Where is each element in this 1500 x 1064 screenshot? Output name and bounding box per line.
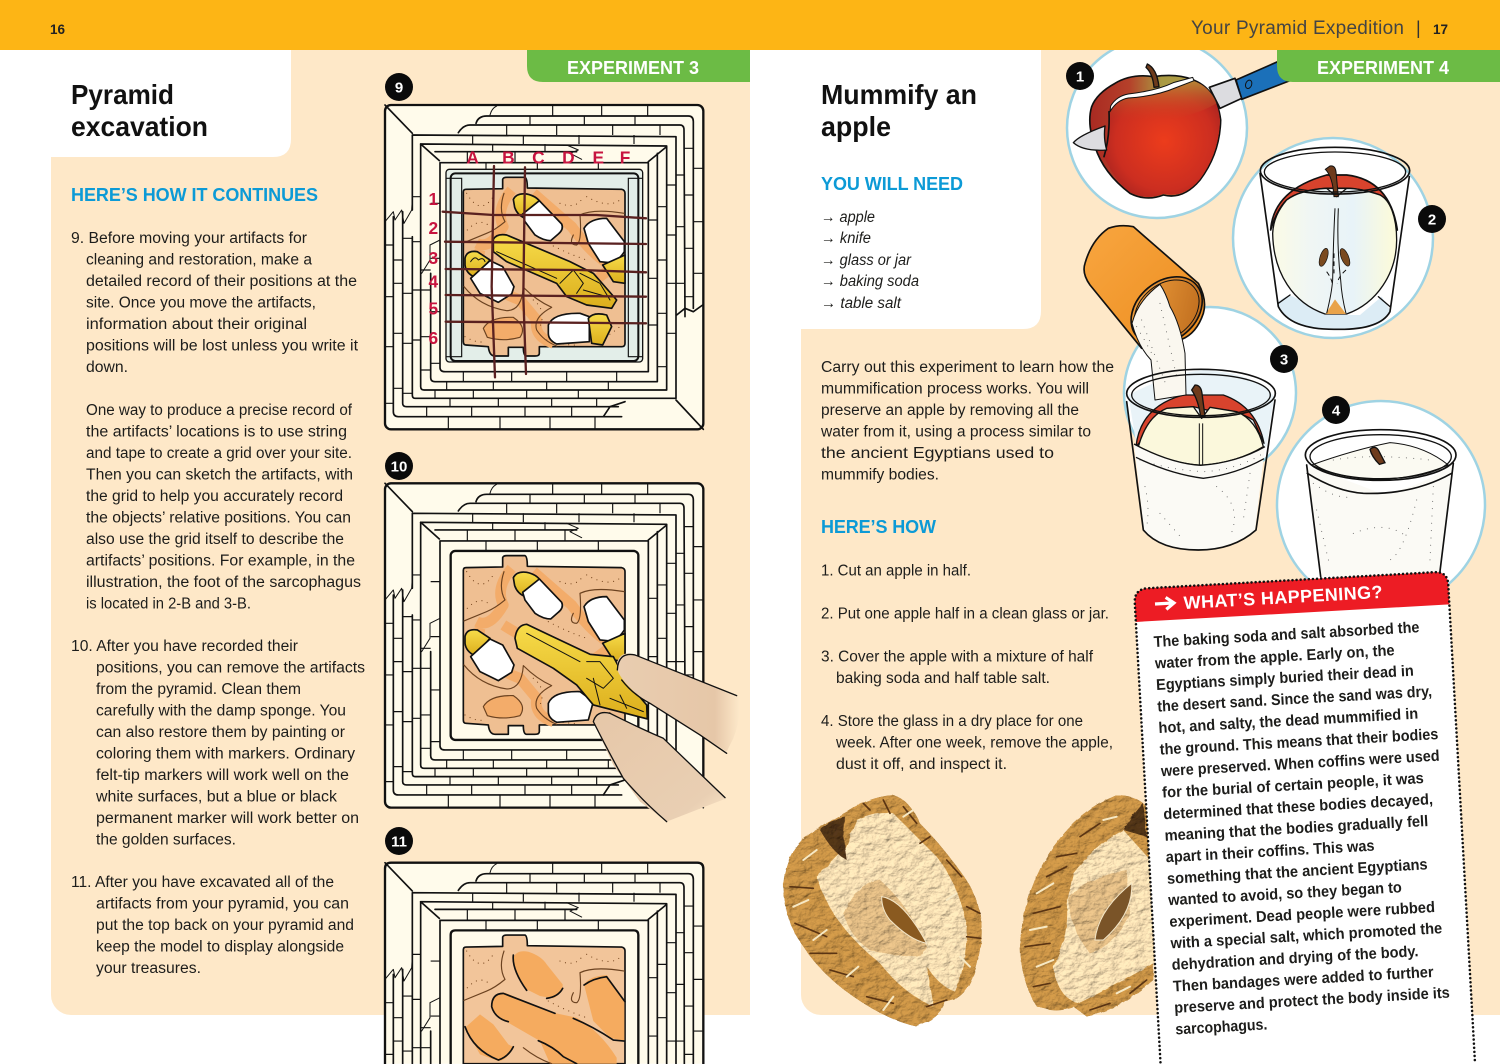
text block: step 10: coloring them with markers. Ordinary xyxy=(96,746,355,762)
step badge 1: 1 xyxy=(1076,68,1084,86)
step badge 1 xyxy=(1066,62,1094,90)
tab: experiment 3 xyxy=(527,50,750,82)
text block: steps: 4. Store the glass in a dry place for one xyxy=(821,713,1083,730)
callout text: sarcophagus. xyxy=(1175,1016,1268,1038)
grid labels: A xyxy=(466,147,479,167)
string grid xyxy=(443,166,646,377)
list: materials: → table salt xyxy=(821,295,902,312)
callout text: water from the apple. Early on, the xyxy=(1154,642,1395,673)
callout text: apart in their coffins. This was xyxy=(1165,838,1375,866)
text block: step 9: 9. Before moving your artifacts for xyxy=(71,230,307,247)
sarcophagus being lifted xyxy=(515,624,647,719)
text block: step 10: from the pyramid. Clean them xyxy=(96,681,301,698)
grid labels: 3 xyxy=(429,248,439,268)
photo: dried apple right xyxy=(1020,795,1153,1017)
heading: Mummify an apple: Mummify an xyxy=(821,79,977,110)
callout text: dehydration and drying of the body. xyxy=(1171,943,1419,974)
callout header band xyxy=(1134,571,1449,622)
grid labels: E xyxy=(593,147,604,167)
heading: Pyramid excavation: excavation xyxy=(71,111,208,142)
text block: step 11: put the top back on your pyramid and xyxy=(96,917,354,934)
text block: step 10: can also restore them by painting or xyxy=(96,724,345,741)
top bar: 16 xyxy=(50,22,66,37)
grid labels: 4 xyxy=(429,271,439,291)
photo: dried apple left xyxy=(783,795,982,1027)
step badge 3 xyxy=(1270,345,1298,373)
text block: step 10: positions, you can remove the artifacts xyxy=(96,660,365,676)
text block: step 9: and tape to create a grid over your site. xyxy=(86,445,352,462)
text block: introduction: water from it, using a process similar to xyxy=(820,424,1091,440)
step badge 11 xyxy=(385,827,413,855)
callout text xyxy=(1152,618,1454,1039)
subheading: here's how it continues: HERE’S HOW IT CONTINUES xyxy=(71,185,318,205)
text block: steps: week. After one week, remove the apple, xyxy=(835,734,1113,752)
text block: step 9: cleaning and restoration, make a xyxy=(86,252,312,268)
top bar: 17 xyxy=(1433,22,1448,37)
grid labels: C xyxy=(532,147,545,167)
callout text: the desert sand. Since the sand was dry, xyxy=(1157,683,1432,716)
text block: step 11: your treasures. xyxy=(96,960,201,977)
text block: step 10: the golden surfaces. xyxy=(96,832,236,848)
grid labels: F xyxy=(620,147,630,167)
illustration: step 3 pouring salt xyxy=(1084,226,1296,550)
text block: introduction: mummification process works. You will xyxy=(821,380,1089,398)
text block: step 11 xyxy=(71,874,354,977)
text block: step 10: 10. After you have recorded their xyxy=(71,638,298,655)
text block: steps: baking soda and half table salt. xyxy=(836,670,1050,687)
text block: step 9: is located in 2-B and 3-B. xyxy=(86,596,251,612)
grid labels: D xyxy=(562,147,575,167)
text block: step 10: permanent marker will work better on xyxy=(96,810,359,827)
callout heading: WHAT’S HAPPENING? xyxy=(1183,582,1383,613)
heading: Mummify an apple: apple xyxy=(821,111,891,142)
callout text: hot, and salty, the dead mummified in xyxy=(1158,706,1419,737)
canopic jars xyxy=(465,572,625,722)
grid labels: B xyxy=(502,147,515,167)
top bar: Your Pyramid Expedition xyxy=(1191,18,1404,39)
text block: step 9: the objects’ relative positions. You can xyxy=(86,510,351,526)
text block: introduction xyxy=(820,359,1114,484)
callout text: the ground. This means that their bodies xyxy=(1159,726,1439,759)
callout text: determined that these bodies decayed, xyxy=(1163,791,1433,823)
artifact cavities xyxy=(464,951,625,1064)
excavated sand xyxy=(463,935,625,1064)
text block: step 11: artifacts from your pyramid, you can xyxy=(96,896,349,912)
artifacts xyxy=(465,194,625,345)
text block: steps: 1. Cut an apple in half. xyxy=(821,562,971,580)
callout text: wanted to avoid, so they began to xyxy=(1167,879,1402,909)
callout text: experiment. Dead people were rubbed xyxy=(1169,899,1435,931)
subheading: here's how: HERE’S HOW xyxy=(821,517,936,537)
text block: step 11: keep the model to display alongside xyxy=(96,938,344,956)
step badge 2 xyxy=(1418,205,1446,233)
text block: steps: 2. Put one apple half in a clean glass or jar. xyxy=(821,606,1109,622)
step badge 3: 3 xyxy=(1280,352,1288,368)
callout text: Then bandages were added to further xyxy=(1173,964,1434,995)
callout card xyxy=(1134,571,1475,1064)
illustration: step 1 cutting apple xyxy=(1067,38,1292,218)
heading: Mummify an apple xyxy=(821,79,977,142)
panel: title box right xyxy=(790,50,1041,329)
list: materials: → apple xyxy=(821,209,875,226)
step badge 9: 9 xyxy=(395,80,403,96)
step badge 10 xyxy=(385,452,413,480)
grid labels: 5 xyxy=(429,299,439,319)
callout text: something that the ancient Egyptians xyxy=(1167,856,1428,888)
text block: step 9: the artifacts’ locations is to use string xyxy=(86,424,347,440)
tab: experiment 4 xyxy=(1277,50,1500,82)
hand: fingers xyxy=(593,653,739,822)
text block: steps: dust it off, and inspect it. xyxy=(836,756,1007,773)
top bar xyxy=(0,0,1500,50)
text block: introduction: Carry out this experiment to learn how the xyxy=(821,359,1114,376)
tab: experiment 4: EXPERIMENT 4 xyxy=(1317,58,1449,78)
step badge 11: 11 xyxy=(391,834,407,850)
text block: step 9: site. Once you move the artifacts, xyxy=(86,294,316,312)
tab: experiment 3: EXPERIMENT 3 xyxy=(567,58,699,78)
callout text: Egyptians simply buried their dead in xyxy=(1156,663,1414,694)
text block: step 9: illustration, the foot of the sarcophagus xyxy=(86,574,361,591)
text block: step 9: positions will be lost unless you write it xyxy=(86,338,359,354)
text block: step 10: carefully with the damp sponge. You xyxy=(96,702,346,720)
grid labels xyxy=(429,147,630,348)
text block: step 9: detailed record of their positions at the xyxy=(86,273,357,290)
list: materials: → knife xyxy=(821,230,871,247)
text block: introduction: preserve an apple by removing all the xyxy=(821,402,1079,419)
text block: step 9: One way to produce a precise record of xyxy=(86,402,353,419)
text block: introduction: mummify bodies. xyxy=(821,466,939,484)
list: materials xyxy=(821,209,919,312)
grid labels: 2 xyxy=(429,218,438,238)
panel: title box left xyxy=(0,50,291,157)
heading: Pyramid excavation xyxy=(71,79,208,142)
illustration: step 2 apple in glass xyxy=(1233,138,1433,338)
text block: steps: 3. Cover the apple with a mixture of half xyxy=(821,648,1094,666)
step badge 4: 4 xyxy=(1332,402,1341,420)
text block: introduction: the ancient Egyptians used to xyxy=(821,445,1054,462)
callout text: preserve and protect the body inside its xyxy=(1174,985,1450,1017)
callout text: with a special salt, which promoted the xyxy=(1169,920,1443,952)
callout text: for the burial of certain people, it was xyxy=(1162,770,1424,802)
text block: step 9: information about their original xyxy=(86,316,307,333)
illustration: step 4 glass filled with salt xyxy=(1277,401,1485,609)
callout: what's happening xyxy=(1134,571,1475,1064)
text block: step 11: 11. After you have excavated all of the xyxy=(71,874,334,891)
text block: step 10: white surfaces, but a blue or black xyxy=(95,788,337,806)
step badge 9 xyxy=(385,73,413,101)
text block: step 9: down. xyxy=(86,359,128,376)
top bar: | xyxy=(1416,18,1421,38)
callout text: meaning that the bodies gradually fell xyxy=(1164,813,1429,845)
text block: step 9 xyxy=(71,230,361,612)
callout text: were preserved. When coffins were used xyxy=(1160,748,1440,780)
illustration: pyramid step 9 with grid xyxy=(385,105,703,429)
list: materials: → baking soda xyxy=(821,273,919,290)
grid labels: 6 xyxy=(429,328,439,348)
step badge 2: 2 xyxy=(1428,212,1436,228)
subheading: you will need: YOU WILL NEED xyxy=(821,174,963,194)
text block: step 9: the grid to help you accurately record xyxy=(86,488,343,505)
illustration: pyramid step 11 excavated xyxy=(385,863,703,1064)
illustration: pyramid step 10 with hand xyxy=(385,483,739,822)
grid labels: 1 xyxy=(429,189,439,209)
text block: step 9: also use the grid itself to describe the xyxy=(86,531,344,548)
step badge 4 xyxy=(1322,396,1350,424)
heading: Pyramid excavation: Pyramid xyxy=(71,79,174,110)
icon: arrow xyxy=(1155,597,1174,610)
text block: step 10 xyxy=(71,638,365,848)
text block: step 9: Then you can sketch the artifacts, with xyxy=(86,466,353,484)
glass cover xyxy=(446,169,643,362)
text block: step 10: felt-tip markers will work well on the xyxy=(96,767,349,784)
step badge 10: 10 xyxy=(391,458,407,476)
text block: steps xyxy=(821,562,1113,773)
text block: step 9: artifacts’ positions. For example, in the xyxy=(86,552,355,570)
callout text: The baking soda and salt absorbed the xyxy=(1153,619,1420,651)
list: materials: → glass or jar xyxy=(821,252,912,269)
